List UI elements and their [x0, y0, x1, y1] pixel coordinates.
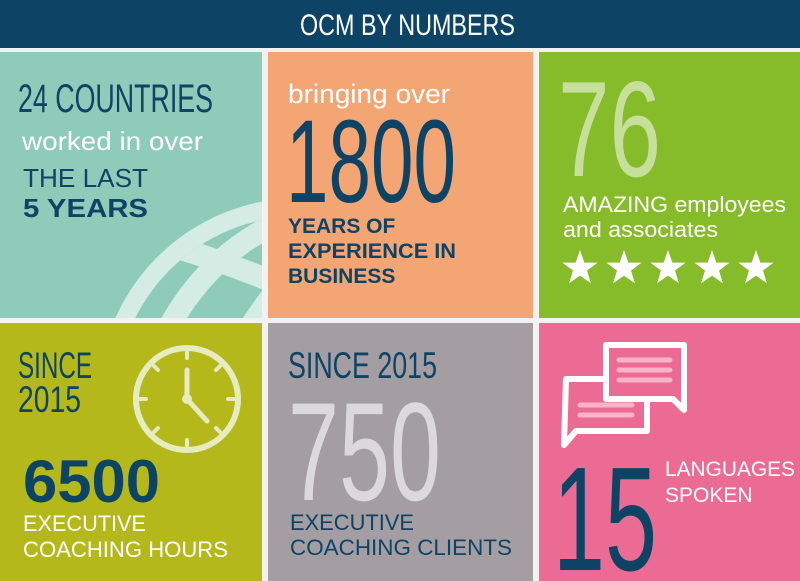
text: worked in over: worked in over — [21, 126, 203, 156]
text: languages spoken: LANGUAGES — [665, 458, 795, 481]
panel: coaching hours: 2015 — [18, 379, 81, 420]
text: since 2015: SINCE 2015 — [288, 345, 437, 386]
text: 24 countries: 24 COUNTRIES — [18, 77, 213, 121]
icon: stars — [562, 250, 774, 283]
panel: coaching clients: COACHING CLIENTS — [290, 535, 512, 560]
text: since 2015: SINCE — [18, 345, 92, 386]
icon: clock — [136, 348, 238, 450]
title — [0, 0, 800, 48]
text: years of experience: EXPERIENCE IN — [288, 240, 456, 263]
text: executive coaching clients: EXECUTIVE — [290, 510, 414, 535]
text: 5 years: 5 YEARS — [23, 193, 148, 223]
text: bringing over: bringing over — [288, 79, 450, 109]
panel: languages: SPOKEN — [665, 484, 753, 507]
text: amazing employees: AMAZING employees — [563, 192, 786, 217]
panel: employees — [539, 52, 800, 318]
text: years of experience — [288, 215, 456, 288]
panel: coaching hours — [0, 323, 262, 581]
number: 6500: 6500 — [23, 448, 160, 515]
text: years of experience: YEARS OF — [288, 215, 396, 238]
text: executive coaching hours: EXECUTIVE — [23, 511, 146, 536]
icon: globe — [116, 202, 262, 318]
title: OCM BY NUMBERS — [300, 9, 515, 42]
number: 76: 76 — [558, 53, 661, 205]
panel: experience — [268, 52, 533, 318]
panel: coaching clients — [268, 323, 533, 581]
text: the last: THE LAST — [23, 163, 148, 193]
panel: languages — [539, 323, 800, 581]
number: 1800: 1800 — [286, 96, 456, 228]
panel: coaching hours: COACHING HOURS — [23, 537, 228, 562]
panel: employees: and associates — [563, 217, 718, 242]
number: 750: 750 — [288, 373, 441, 530]
text: years of experience: BUSINESS — [288, 265, 395, 288]
panel: countries — [0, 52, 262, 318]
icon: speech bubbles — [564, 345, 684, 445]
